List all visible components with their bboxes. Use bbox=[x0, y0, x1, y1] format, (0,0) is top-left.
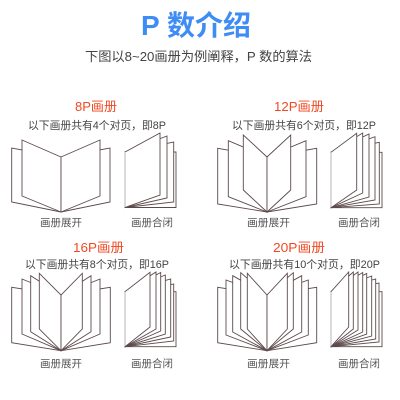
label: 16P open: 画册展开 bbox=[40, 358, 82, 370]
title: P 数介绍 bbox=[141, 10, 251, 41]
diagram: 16P open bbox=[12, 273, 110, 351]
heading: 12P: 12P画册 bbox=[274, 99, 324, 114]
text: 12P description: 以下画册共有6个对页，即12P bbox=[232, 118, 376, 132]
label: 12P closed: 画册合闭 bbox=[338, 216, 380, 229]
diagram: 20P open bbox=[218, 273, 317, 351]
label: 12P open: 画册展开 bbox=[247, 217, 290, 229]
subtitle: 下图以8~20画册为例阐释，P 数的算法 bbox=[85, 49, 312, 64]
diagram: 12P open bbox=[218, 135, 317, 212]
heading: 16P: 16P画册 bbox=[73, 240, 124, 255]
panel: 12P bbox=[218, 99, 382, 229]
heading: 20P: 20P画册 bbox=[273, 240, 325, 255]
label: 16P closed: 画册合闭 bbox=[131, 357, 173, 370]
panel: 8P bbox=[12, 99, 176, 229]
label: 20P closed: 画册合闭 bbox=[338, 357, 380, 370]
diagram: 8P closed bbox=[125, 133, 176, 208]
label: 20P open: 画册展开 bbox=[247, 358, 290, 370]
diagram: 16P closed bbox=[125, 272, 176, 347]
diagram: 8P open bbox=[12, 140, 110, 212]
text: 20P description: 以下画册共有10个对页，即20P bbox=[229, 257, 380, 271]
heading: 8P: 8P画册 bbox=[75, 99, 117, 114]
text: 16P description: 以下画册共有8个对页，即16P bbox=[25, 257, 169, 271]
label: 8P closed: 画册合闭 bbox=[131, 216, 173, 229]
text: 8P description: 以下画册共有4个对页，即8P bbox=[28, 118, 166, 132]
diagram: 20P closed bbox=[331, 272, 382, 347]
diagram: 12P closed bbox=[331, 133, 382, 208]
label: 8P open: 画册展开 bbox=[40, 217, 82, 229]
panel: 16P bbox=[12, 240, 176, 370]
panel: 20P bbox=[218, 240, 382, 370]
